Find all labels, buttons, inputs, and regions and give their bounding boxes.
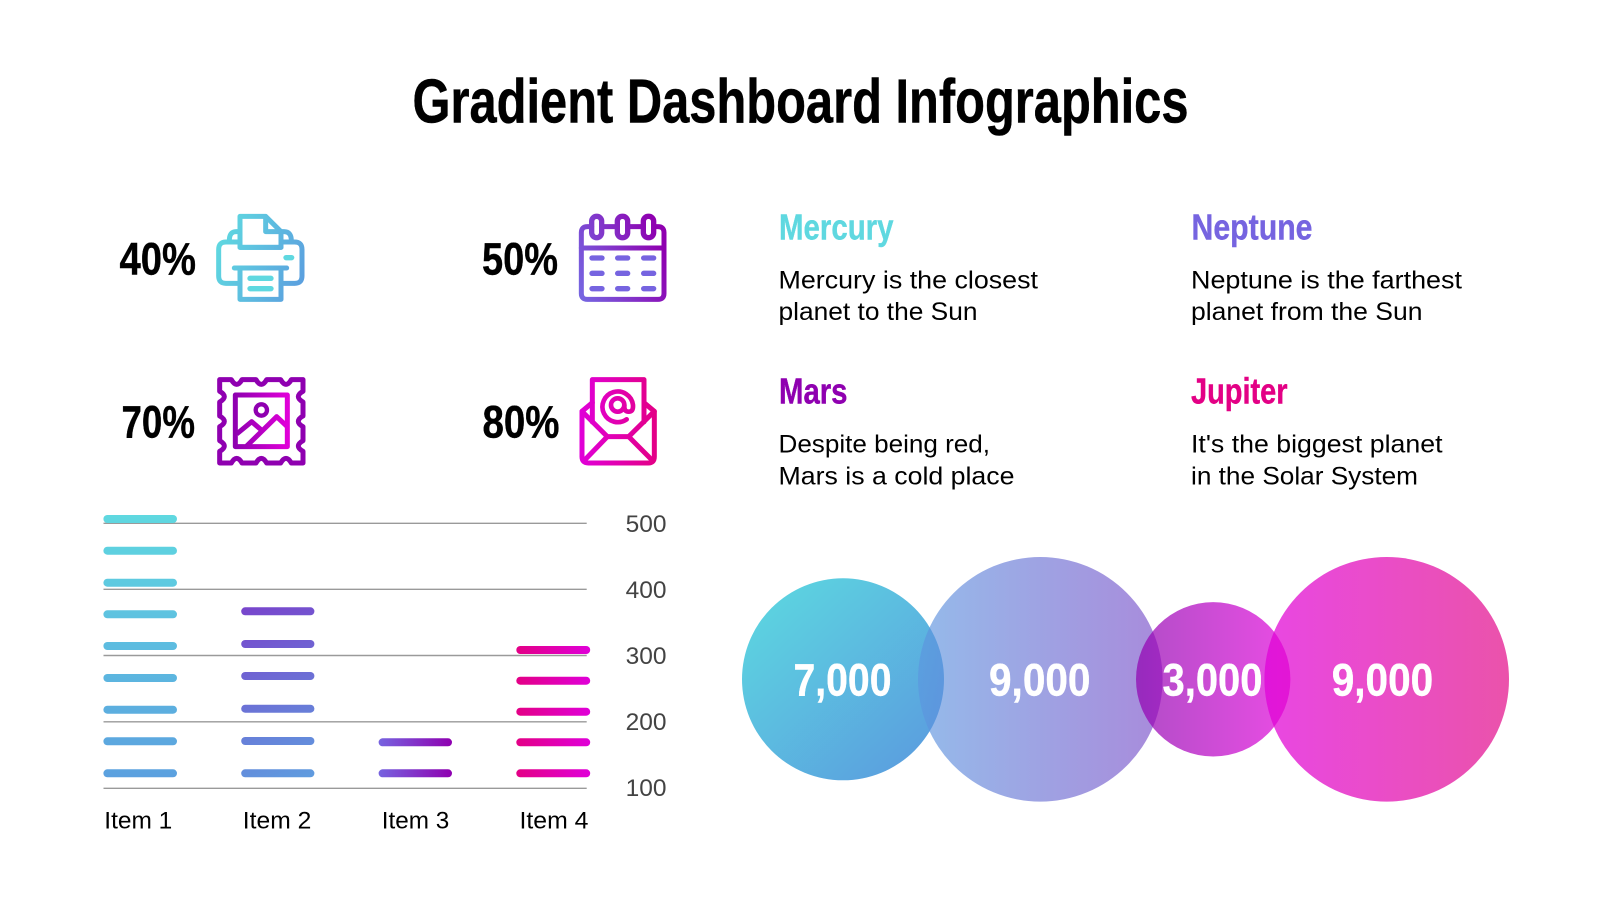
icon: stamp with picture <box>220 380 303 463</box>
text block: Neptune <box>1191 206 1462 326</box>
bar chart <box>103 511 666 834</box>
value axis labels: 400 <box>626 577 666 604</box>
text block: Jupiter: in the Solar System <box>1191 462 1418 490</box>
text block: Mars <box>778 370 1014 490</box>
bubble values: 9,000 <box>1332 655 1433 706</box>
bubble values <box>794 655 1433 706</box>
bubble values: 3,000 <box>1162 655 1262 706</box>
bubble: 7,000 <box>742 578 944 780</box>
panel: planet descriptions <box>778 206 1462 490</box>
series: Item 4 bars <box>516 646 590 777</box>
text block: Mercury: Mercury <box>779 206 894 247</box>
text block: Mars: Mars <box>779 370 848 411</box>
text block: Mars: Despite being red, <box>778 431 990 459</box>
bubble values: 9,000 <box>989 655 1090 706</box>
text block: Jupiter <box>1191 370 1443 490</box>
value axis labels: 100 <box>626 775 666 802</box>
bubble: 9,000 <box>918 557 1163 802</box>
icon: printer <box>219 216 302 299</box>
text block: Jupiter: Jupiter <box>1191 370 1288 411</box>
stat: 80%: 80% <box>482 396 560 448</box>
value axis labels: 500 <box>626 511 666 538</box>
text block: Mercury: planet to the Sun <box>778 298 978 326</box>
text block: Neptune: Neptune <box>1192 206 1312 247</box>
text block: Mercury: Mercury is the closest <box>778 266 1038 294</box>
stat: 50%: 50% <box>482 234 558 284</box>
text block: Neptune: Neptune is the farthest <box>1191 266 1462 294</box>
panel: percentage icons <box>120 216 664 463</box>
bubble values: 7,000 <box>794 655 892 706</box>
title: Gradient Dashboard Infographics <box>412 68 1188 136</box>
series: Item 3 bars <box>379 738 452 777</box>
bubble: 3,000 <box>1136 602 1290 756</box>
icon: calendar <box>581 216 664 299</box>
series: Item 1 bars <box>103 515 177 777</box>
category axis labels <box>104 808 589 834</box>
text block: Mars: Mars is a cold place <box>778 462 1014 490</box>
text block: Neptune: planet from the Sun <box>1191 298 1422 326</box>
category axis labels: Item 1 <box>104 808 172 834</box>
text block: Jupiter: It's the biggest planet <box>1191 431 1443 459</box>
stat: 40%: 40% <box>120 234 196 284</box>
category axis labels: Item 4 <box>520 808 588 834</box>
text block: Mercury <box>778 206 1038 326</box>
category axis labels: Item 2 <box>243 808 311 834</box>
value axis labels <box>626 511 666 802</box>
category axis labels: Item 3 <box>382 808 449 834</box>
bubble chart <box>742 557 1509 802</box>
value axis labels: 300 <box>626 643 666 670</box>
value axis labels: 200 <box>626 709 666 736</box>
stat: 70%: 70% <box>122 396 195 448</box>
gridlines <box>104 523 587 788</box>
series: Item 2 bars <box>241 607 314 777</box>
bubble: 9,000 <box>1264 557 1509 802</box>
icon: envelope with at sign <box>582 380 654 463</box>
